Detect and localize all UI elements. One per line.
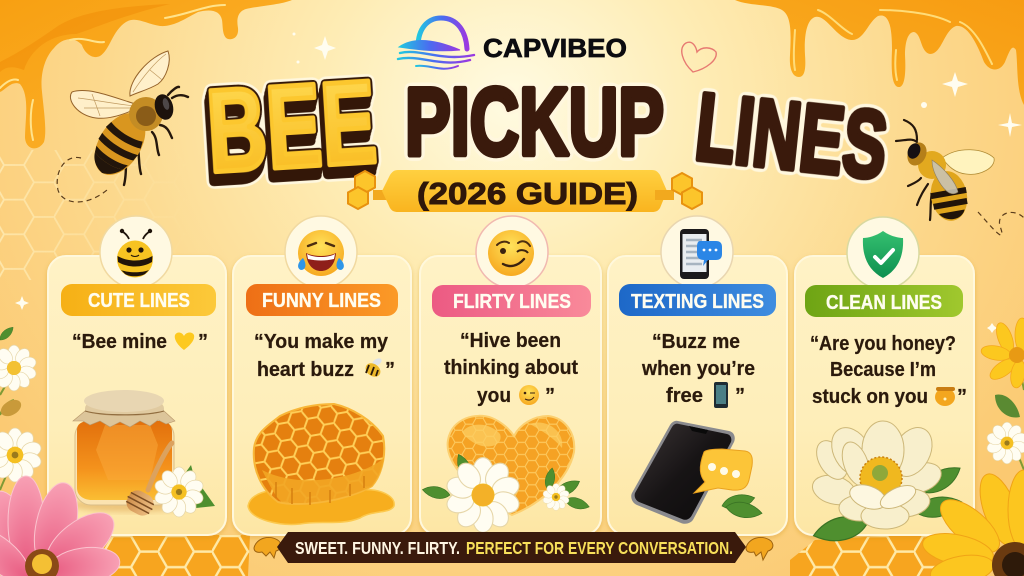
quote: “Buzz me: [652, 331, 740, 353]
hexagon icon right: [672, 173, 702, 209]
honey drip top right: [735, 0, 1024, 105]
hexagon icon left: [348, 171, 375, 209]
quote: [641, 331, 755, 408]
logo: CapVibeo: [398, 18, 627, 69]
bottom banner: [254, 532, 773, 563]
label pill: [805, 285, 963, 317]
icon: honey blob left: [254, 537, 281, 558]
card background: [233, 256, 411, 535]
quote: ”: [957, 386, 967, 408]
decorative honeycomb bottom right: [790, 532, 950, 576]
panel: texting lines: [608, 216, 787, 535]
label pill: CUTE LINES: [88, 290, 190, 312]
quote: ”: [735, 385, 745, 407]
label pill: [61, 284, 216, 316]
heart doodle: [682, 42, 716, 72]
bee left: [70, 51, 188, 185]
icon: bee face: [100, 216, 172, 288]
quote: thinking about: [444, 357, 578, 379]
panel: clean lines: [795, 217, 974, 545]
quote: when you’re: [641, 358, 755, 380]
card background: [420, 256, 601, 535]
subtitle ribbon: [348, 170, 702, 212]
icon: small bee: [363, 357, 383, 380]
quote: free: [666, 385, 703, 407]
quote: stuck on you: [812, 386, 928, 408]
card background: [48, 256, 226, 535]
quote: ”: [545, 385, 555, 407]
quote: [810, 333, 967, 408]
logo icon: cap and waves: [398, 18, 474, 69]
honey drip top left: [0, 0, 292, 148]
icon: yellow heart: [175, 332, 194, 350]
title word: BEE: BEE: [203, 56, 380, 198]
sunflower bottom right: [920, 469, 1024, 576]
logo wordmark: CAPVIBEO: [483, 33, 627, 63]
icon: green shield: [847, 217, 919, 289]
sparkles: [15, 32, 1022, 333]
icon: phone with chat bubble: [661, 216, 733, 288]
pink flower bottom left: [0, 476, 124, 576]
icon: small phone: [714, 382, 728, 408]
decorative honeycomb bottom left: [100, 535, 250, 576]
bottom banner: PERFECT FOR EVERY CONVERSATION.: [466, 538, 733, 558]
icon: honey pot: [935, 387, 955, 406]
quote: ”: [198, 331, 208, 353]
label pill: [619, 284, 776, 316]
label pill: [432, 285, 591, 317]
title: [203, 56, 892, 200]
illustration: honey jar: [70, 390, 215, 519]
label pill: FLIRTY LINES: [453, 291, 571, 313]
panel: funny lines: [233, 216, 411, 535]
dashed flight trail right: [978, 212, 1024, 235]
honeycomb background pattern: [0, 150, 138, 280]
quote: ”: [385, 359, 395, 381]
quote: “You make my: [254, 331, 389, 353]
quote: “Bee mine: [72, 331, 167, 353]
quote: “Are you honey?: [810, 333, 956, 355]
illustration: white flower: [809, 420, 965, 545]
banner text: SWEET. FUNNY. FLIRTY.: [295, 538, 460, 558]
quote: “Hive been: [460, 330, 561, 352]
illustration: honey heart: [421, 416, 591, 532]
label pill: TEXTING LINES: [631, 291, 764, 313]
label pill: FUNNY LINES: [262, 290, 381, 312]
icon: wink small: [519, 385, 539, 405]
panel: flirty lines: [420, 216, 601, 535]
quote: heart buzz: [257, 359, 354, 381]
dashed flight trail left: [57, 157, 107, 202]
quote: [254, 331, 395, 381]
quote: Because I’m: [830, 359, 936, 381]
flowers right: [980, 318, 1024, 470]
quote: [444, 330, 578, 407]
icon: honey blob right: [746, 537, 773, 560]
illustration: phone and speech bubble: [631, 421, 763, 524]
panel: cute lines: [48, 216, 226, 535]
card background: [795, 256, 974, 535]
quote: you: [477, 385, 511, 407]
subtitle text: (2026 GUIDE): [417, 176, 638, 211]
icon: winking emoji: [476, 216, 548, 288]
flowers left: [0, 325, 43, 490]
icon: laughing emoji: [285, 216, 357, 288]
illustration: honeycomb: [248, 404, 394, 524]
title word: PICKUP: PICKUP: [405, 68, 664, 176]
label pill: CLEAN LINES: [826, 292, 942, 314]
bee right: [896, 120, 994, 224]
label pill: [246, 284, 398, 316]
title word: LINES: LINES: [691, 73, 892, 200]
card background: [608, 256, 787, 535]
